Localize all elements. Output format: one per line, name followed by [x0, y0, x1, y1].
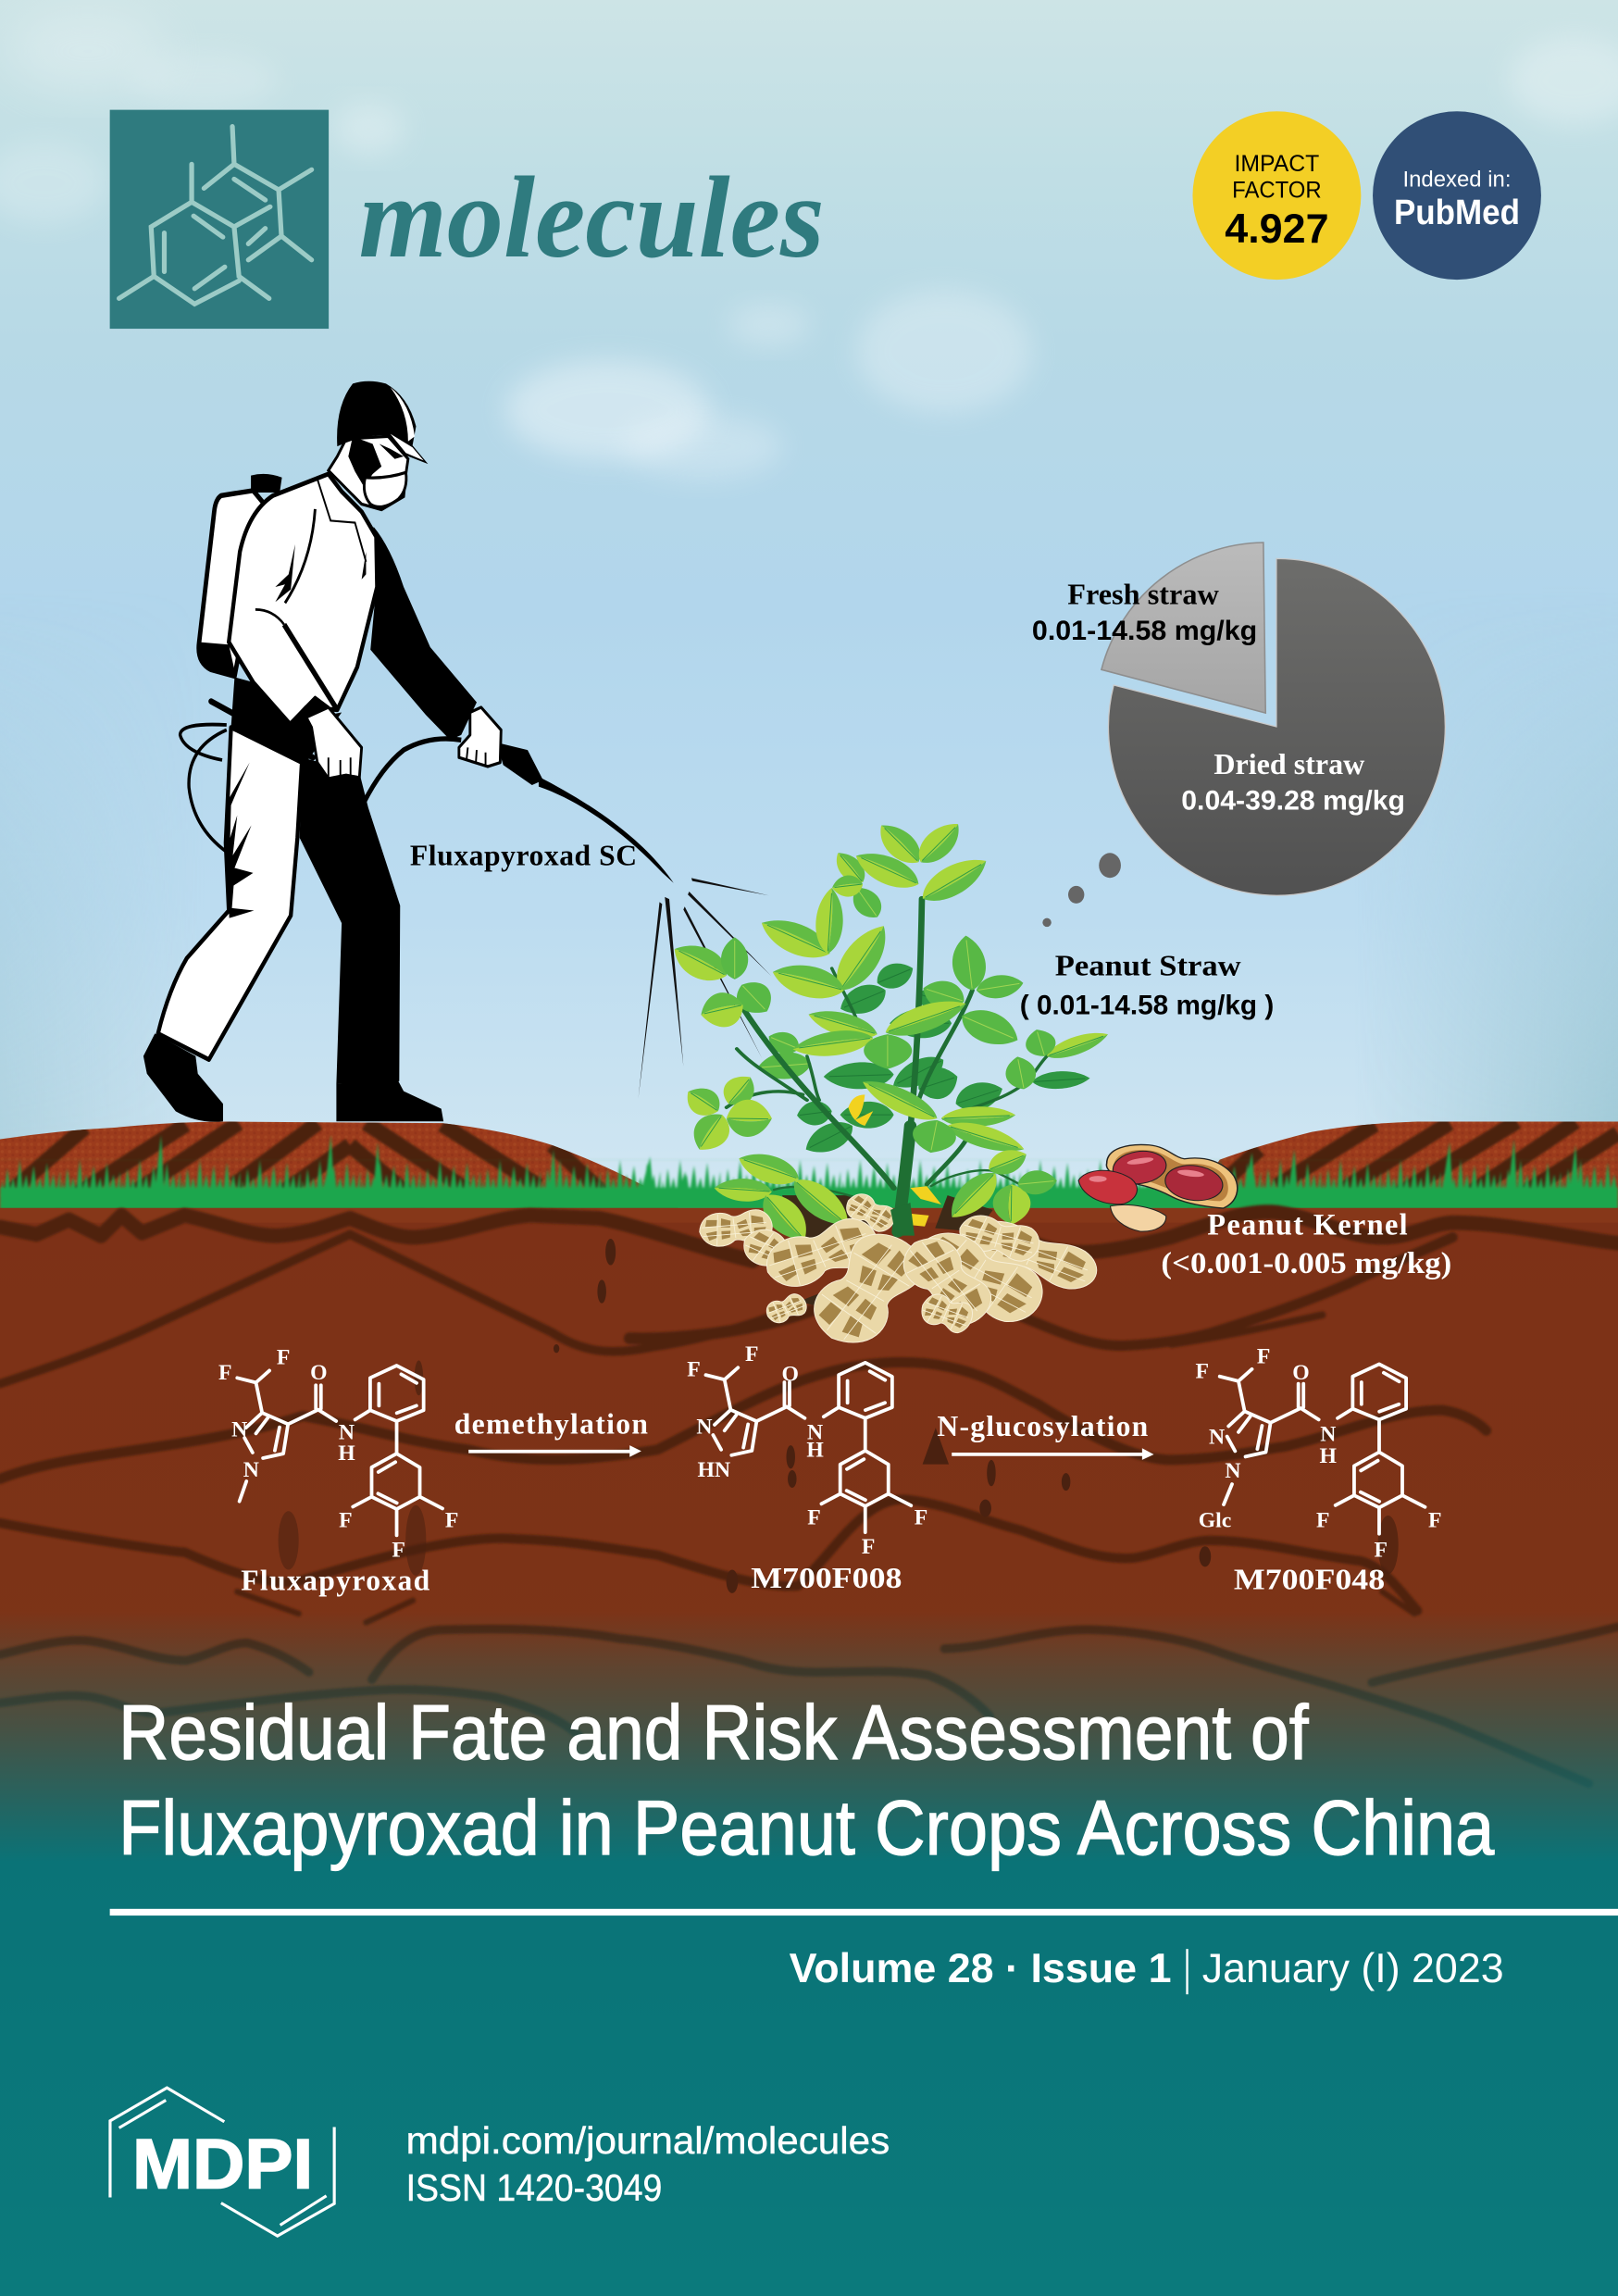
far leg [300, 757, 400, 1084]
journal name: molecules [359, 153, 825, 282]
kernel highlights [1089, 1156, 1204, 1182]
impact factor badge: FACTOR [1232, 179, 1322, 204]
peanut kernel illustration [1078, 1144, 1238, 1231]
structure: M700F008: F [687, 1358, 701, 1382]
structure: fluxapyroxad [218, 1345, 458, 1562]
sprayer man illustration [143, 381, 771, 1122]
soil cracks [0, 1212, 1618, 1783]
label: dried straw: Dried straw [1214, 748, 1364, 780]
structure: M700F008: N [807, 1421, 823, 1445]
bright leaves [666, 816, 1112, 1248]
boots [143, 1033, 443, 1122]
structure: M700F008: F [807, 1505, 821, 1529]
label: fluxapyroxad SC: Fluxapyroxad SC [410, 840, 637, 872]
spray lance and hose [180, 702, 674, 883]
label: peanut kernel [1161, 1208, 1451, 1280]
gradient from soil to teal [0, 1611, 1618, 1863]
structure: M700F048: F [1428, 1509, 1442, 1533]
label: peanut kernel: (<0.001-0.005 mg/kg) [1161, 1246, 1451, 1280]
teal footer [0, 1861, 1618, 2296]
structure: M700F008 [687, 1342, 927, 1559]
label: dried straw [1181, 748, 1405, 817]
structure: M700F048: N [1225, 1459, 1241, 1483]
peanut plant illustration [666, 816, 1112, 1356]
label: fresh straw: Fresh straw [1067, 579, 1219, 611]
MDPI logo [110, 2088, 334, 2236]
structure: fluxapyroxad: F [218, 1361, 232, 1385]
spray droplet streaks [639, 878, 771, 1099]
structure: M700F008: H [806, 1439, 824, 1463]
shirt [229, 474, 377, 725]
ISSN: ISSN 1420-3049 [406, 2166, 662, 2209]
impact factor badge: IMPACT [1235, 152, 1319, 177]
title rule [110, 1909, 1618, 1915]
arrow: demethylation [454, 1407, 648, 1457]
peanut pods [697, 1190, 1104, 1356]
slice: fresh straw [1101, 543, 1265, 713]
structure: M700F008: N [696, 1415, 712, 1439]
label: fresh straw: 0.01-14.58 mg/kg [1032, 616, 1257, 646]
grass band [0, 1135, 1618, 1209]
journal logo [110, 110, 329, 329]
structure: M700F048: F [1195, 1359, 1209, 1383]
dark gaps behind plant base [782, 1195, 993, 1309]
backpack [199, 474, 282, 679]
structure: M700F008: F [745, 1342, 759, 1366]
MDPI logo: MDPI [132, 2125, 313, 2203]
structure: fluxapyroxad: H [338, 1441, 355, 1466]
near leg [158, 728, 302, 1060]
molecule icon [119, 127, 312, 304]
soil layer [0, 1208, 1618, 1867]
label: peanut straw: Peanut Straw [1055, 949, 1241, 981]
structure: M700F048: N [1209, 1425, 1225, 1449]
title: Fluxapyroxad in Peanut Crops Across China [118, 1784, 1495, 1871]
pubmed badge: Indexed in: [1402, 168, 1512, 193]
title [118, 1689, 1495, 1871]
far arm [370, 527, 477, 740]
volume and issue line [790, 1946, 1504, 1994]
structure: M700F048: F [1316, 1509, 1329, 1533]
structure: M700F048: Glc [1199, 1509, 1231, 1533]
sky edge shading [0, 733, 1618, 1139]
structure: M700F008: O [782, 1362, 799, 1386]
structure: M700F048: N [1320, 1422, 1336, 1446]
structure: M700F048: O [1292, 1361, 1310, 1385]
pie chart [1101, 543, 1445, 895]
head with cap and mask [329, 381, 428, 509]
structure: M700F048: F [1374, 1538, 1388, 1562]
stems [727, 899, 1049, 1232]
structure: fluxapyroxad: F [392, 1538, 405, 1562]
clouds [0, 10, 1618, 479]
structure: fluxapyroxad: F [445, 1509, 458, 1533]
structure: fluxapyroxad: O [310, 1361, 328, 1385]
structure: M700F008: F [862, 1535, 875, 1559]
title: Residual Fate and Risk Assessment of [118, 1689, 1309, 1776]
yellow flowers [848, 1094, 941, 1227]
arrow: N-glucosylation: N-glucosylation [937, 1410, 1149, 1442]
label: M700F048: M700F048 [1234, 1564, 1385, 1596]
structure: fluxapyroxad: F [277, 1345, 290, 1369]
structure: M700F048: H [1320, 1444, 1338, 1468]
label: peanut kernel: Peanut Kernel [1207, 1208, 1408, 1242]
structure: fluxapyroxad: N [339, 1421, 355, 1445]
structure: fluxapyroxad: N [231, 1418, 247, 1442]
pubmed badge [1373, 111, 1541, 280]
journal url: mdpi.com/journal/molecules [406, 2119, 890, 2162]
volume and issue line: January (I) 2023 [1202, 1946, 1504, 1991]
pubmed badge: PubMed [1394, 193, 1520, 232]
structure: fluxapyroxad: N [243, 1458, 259, 1482]
label: peanut straw: ( 0.01-14.58 mg/kg ) [1020, 990, 1274, 1020]
label: dried straw: 0.04-39.28 mg/kg [1181, 786, 1405, 817]
structure: fluxapyroxad: F [339, 1509, 353, 1533]
impact factor badge [1192, 111, 1361, 280]
label: peanut straw [1020, 949, 1274, 1020]
kernels [1078, 1148, 1226, 1204]
left hill [0, 1122, 678, 1208]
open shell [1106, 1144, 1238, 1208]
volume and issue line: Volume 28 · Issue 1 [790, 1946, 1172, 1991]
structure: M700F008: F [915, 1505, 927, 1529]
arrow: N-glucosylation [937, 1410, 1154, 1460]
structure: M700F008: HN [698, 1458, 730, 1482]
label: fluxapyroxad: Fluxapyroxad [241, 1564, 430, 1596]
soil spots [279, 1239, 1399, 1593]
shell interior [1114, 1150, 1228, 1201]
slice: dried straw [1108, 558, 1445, 895]
thought bubbles [1042, 853, 1121, 927]
waist [231, 678, 342, 763]
structure: M700F048 [1195, 1345, 1442, 1562]
right hill [1187, 1122, 1618, 1208]
impact factor badge: 4.927 [1225, 206, 1329, 252]
stem base [890, 1203, 915, 1236]
gloved hands [291, 697, 501, 779]
dark back leaves [756, 957, 1007, 1161]
sky background [0, 0, 1618, 1216]
label: fresh straw [1032, 579, 1257, 646]
structure: M700F048: F [1257, 1345, 1270, 1368]
arrow: demethylation: demethylation [454, 1407, 648, 1440]
half kernel [1110, 1204, 1166, 1231]
label: M700F008: M700F008 [751, 1562, 902, 1594]
logo square [110, 110, 329, 329]
